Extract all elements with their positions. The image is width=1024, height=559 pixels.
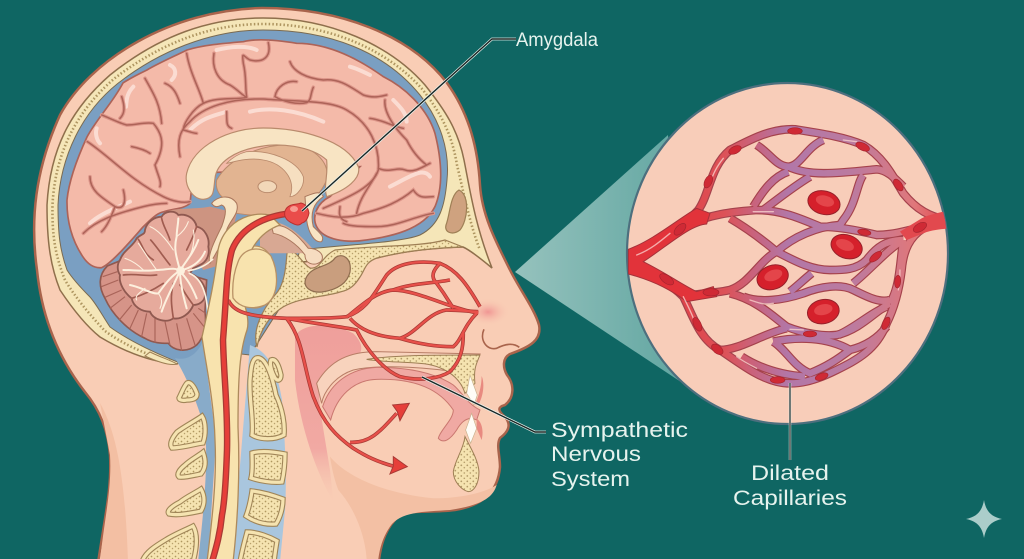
nerve casing xyxy=(228,262,480,467)
brain xyxy=(67,40,441,270)
red blood cell 1 xyxy=(807,190,840,216)
magnifier cone xyxy=(515,135,690,388)
back of neck shading xyxy=(100,403,128,559)
vertebrae xyxy=(142,358,285,559)
capillary red cells xyxy=(658,128,928,383)
red blood cell 3 xyxy=(756,264,789,290)
leader: dilated capillaries xyxy=(789,383,791,460)
pons xyxy=(234,246,276,308)
brain folds xyxy=(83,43,433,233)
leader: amygdala xyxy=(302,39,516,211)
palate arch xyxy=(317,352,480,403)
skull stipple xyxy=(52,24,480,361)
arbor vitae xyxy=(123,218,213,327)
upper arrow head xyxy=(393,403,409,421)
jaw shadow xyxy=(330,457,497,559)
fornix arc xyxy=(227,151,304,197)
label: sympathetic nervous system: System xyxy=(551,468,630,491)
label: amygdala: Amygdala xyxy=(516,30,598,51)
throat band xyxy=(295,325,361,502)
cerebrum xyxy=(67,40,441,268)
circle lens xyxy=(627,83,948,424)
capillary network xyxy=(628,128,947,383)
label: sympathetic nervous system: Sympathetic xyxy=(551,419,688,442)
pineal ellipse xyxy=(258,181,277,193)
spine fluid columns xyxy=(175,340,286,559)
vertebra fill xyxy=(142,358,285,559)
nerve core xyxy=(228,262,480,467)
vertebra rim xyxy=(142,358,285,559)
nerves xyxy=(228,262,480,474)
left trunk xyxy=(628,208,717,302)
vessel core xyxy=(678,126,946,386)
cerebellum xyxy=(100,212,213,351)
lobe clefts xyxy=(123,218,197,318)
pons overlay xyxy=(233,249,277,308)
sphenoid sinus xyxy=(305,256,350,292)
main nerve core xyxy=(212,213,297,559)
cerebellum outer ribs xyxy=(100,257,207,350)
label: dilated capillaries: Capillaries xyxy=(733,487,847,510)
brain fold shadow xyxy=(83,43,433,233)
label: sympathetic nervous system: Nervous xyxy=(551,443,641,466)
skull base bone xyxy=(256,240,463,347)
tissue under brain xyxy=(163,207,237,270)
lips xyxy=(475,376,483,440)
magnified capillary circle xyxy=(627,83,948,424)
brain highlights xyxy=(90,47,430,223)
icon: sparkle xyxy=(966,500,1002,538)
lower arrow head xyxy=(390,457,407,474)
cream fibre tracts xyxy=(209,197,237,263)
thalamus xyxy=(216,145,327,216)
cerebellum lobes xyxy=(118,212,209,321)
midbrain tissue xyxy=(260,222,317,253)
vessel casing xyxy=(672,124,946,388)
pituitary xyxy=(272,225,322,264)
nose flush xyxy=(466,298,510,326)
red blood cell 2 xyxy=(830,234,863,260)
vessel highlights xyxy=(637,140,900,368)
cerebellum rib lines xyxy=(101,272,206,351)
jaw bone xyxy=(453,437,479,492)
jaw and lower face xyxy=(295,325,519,559)
occipital bone end xyxy=(145,352,177,365)
skull bone band xyxy=(47,18,492,364)
teeth xyxy=(466,375,477,443)
nostril xyxy=(483,329,519,349)
spinal cord xyxy=(202,214,280,559)
right trunk xyxy=(900,211,947,240)
corpus callosum xyxy=(186,128,359,199)
head silhouette xyxy=(34,8,539,559)
label: dilated capillaries: Dilated xyxy=(751,462,829,485)
red blood cell 4 xyxy=(806,298,840,324)
leader: sympathetic nervous system xyxy=(422,377,546,432)
tongue band xyxy=(323,367,480,441)
palate bone xyxy=(367,355,480,393)
amygdala marker xyxy=(285,203,309,225)
frontal sinus xyxy=(446,190,467,233)
cerebrospinal fluid xyxy=(58,30,448,363)
main descending nerve xyxy=(212,213,297,559)
right cream tract xyxy=(305,193,323,242)
